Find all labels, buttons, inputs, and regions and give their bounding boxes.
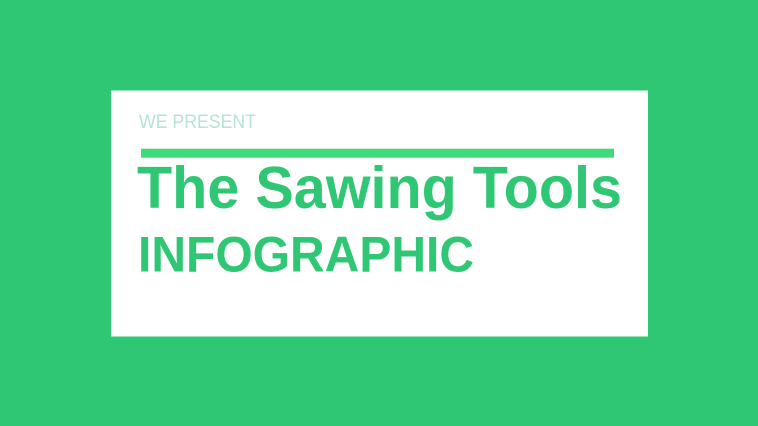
title: The Sawing Tools (137, 155, 622, 221)
accent rule (141, 149, 614, 158)
panel: white title card (111, 90, 648, 336)
eyebrow text: we present: WE PRESENT (139, 111, 256, 133)
subtitle: INFOGRAPHIC (138, 226, 474, 282)
